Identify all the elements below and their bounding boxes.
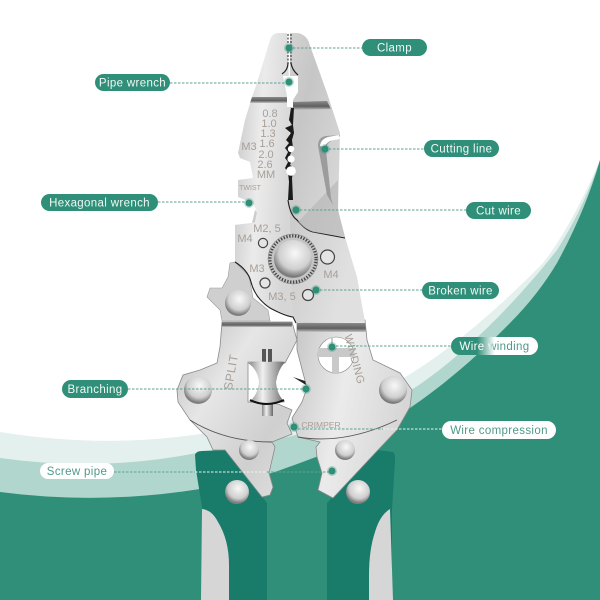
engraved labels: M4 [323,269,339,281]
pivot plate outline [235,200,345,323]
engraved labels: MM [257,169,275,181]
engraved labels: M4 [237,233,253,245]
engraved labels: SPLIT [221,353,241,391]
engraved labels: 0.8 [262,108,278,120]
background: pale curved band [0,160,600,600]
engraved labels: M3 [241,141,257,153]
label: Broken wire [422,282,499,299]
label: Cut wire [466,202,531,219]
label: Broken wire: Broken wire [428,286,493,298]
spool [248,349,285,416]
engraved labels: CRIMPER [301,420,341,430]
background: mid curved band [0,160,600,600]
engraved labels: TWIST [239,185,262,192]
label: Hexagonal wrench: Hexagonal wrench [49,198,150,210]
rivets [184,290,407,504]
label: Wire compression: Wire compression [450,425,548,437]
engraved labels: 2.6 [257,159,273,171]
small pivot tab [207,262,270,321]
engraved labels [221,108,366,430]
shaded blade facet [298,180,345,237]
label: Branching: Branching [68,384,122,396]
label: Screw pipe [40,463,114,479]
engraved labels: M2, 5 [253,223,281,235]
label: Cut wire: Cut wire [476,206,521,218]
engraved labels: 1.0 [261,118,277,130]
right handle grip inlay [369,509,393,600]
label: Hexagonal wrench [41,194,158,211]
label: Screw pipe: Screw pipe [47,466,107,478]
engraved labels: 2.0 [258,149,274,161]
wire winding hole [318,337,354,374]
label: Clamp: Clamp [377,42,412,54]
engraved labels: WINDING [342,333,366,385]
pliers: right jaw and pivot plate [235,33,365,323]
jaw opening with teeth [282,34,298,200]
engraved labels: M3, 5 [268,291,296,303]
label: Clamp [362,39,427,56]
engraved labels: M3 [249,263,265,275]
main rivet [268,234,318,284]
label: Wire winding: Wire winding [459,341,530,353]
crimping notch spike [293,377,306,385]
pliers: left jaw [235,33,293,317]
background: green curved area [0,160,600,600]
left handle grip inlay [201,509,229,600]
engraved labels: 1.3 [260,128,276,140]
marker dots [246,44,336,474]
left handle [195,450,267,600]
engraved labels: 1.6 [259,138,275,150]
right handle [327,450,395,600]
pliers: left arm lower metal [177,322,297,497]
label: Wire compression [442,421,556,439]
label: Cutting line: Cutting line [431,144,492,156]
leader lines [114,48,466,472]
label: Cutting line [424,140,499,157]
label: Pipe wrench: Pipe wrench [99,78,166,90]
cutting line slot [318,135,340,205]
jaw dark bands [222,97,366,332]
label: Branching [62,380,128,398]
adjustment holes [258,238,334,300]
label: Wire winding [451,337,538,355]
label: Pipe wrench [95,74,170,91]
pliers: right arm lower metal [292,320,412,498]
lower body dark arcs [190,420,397,442]
